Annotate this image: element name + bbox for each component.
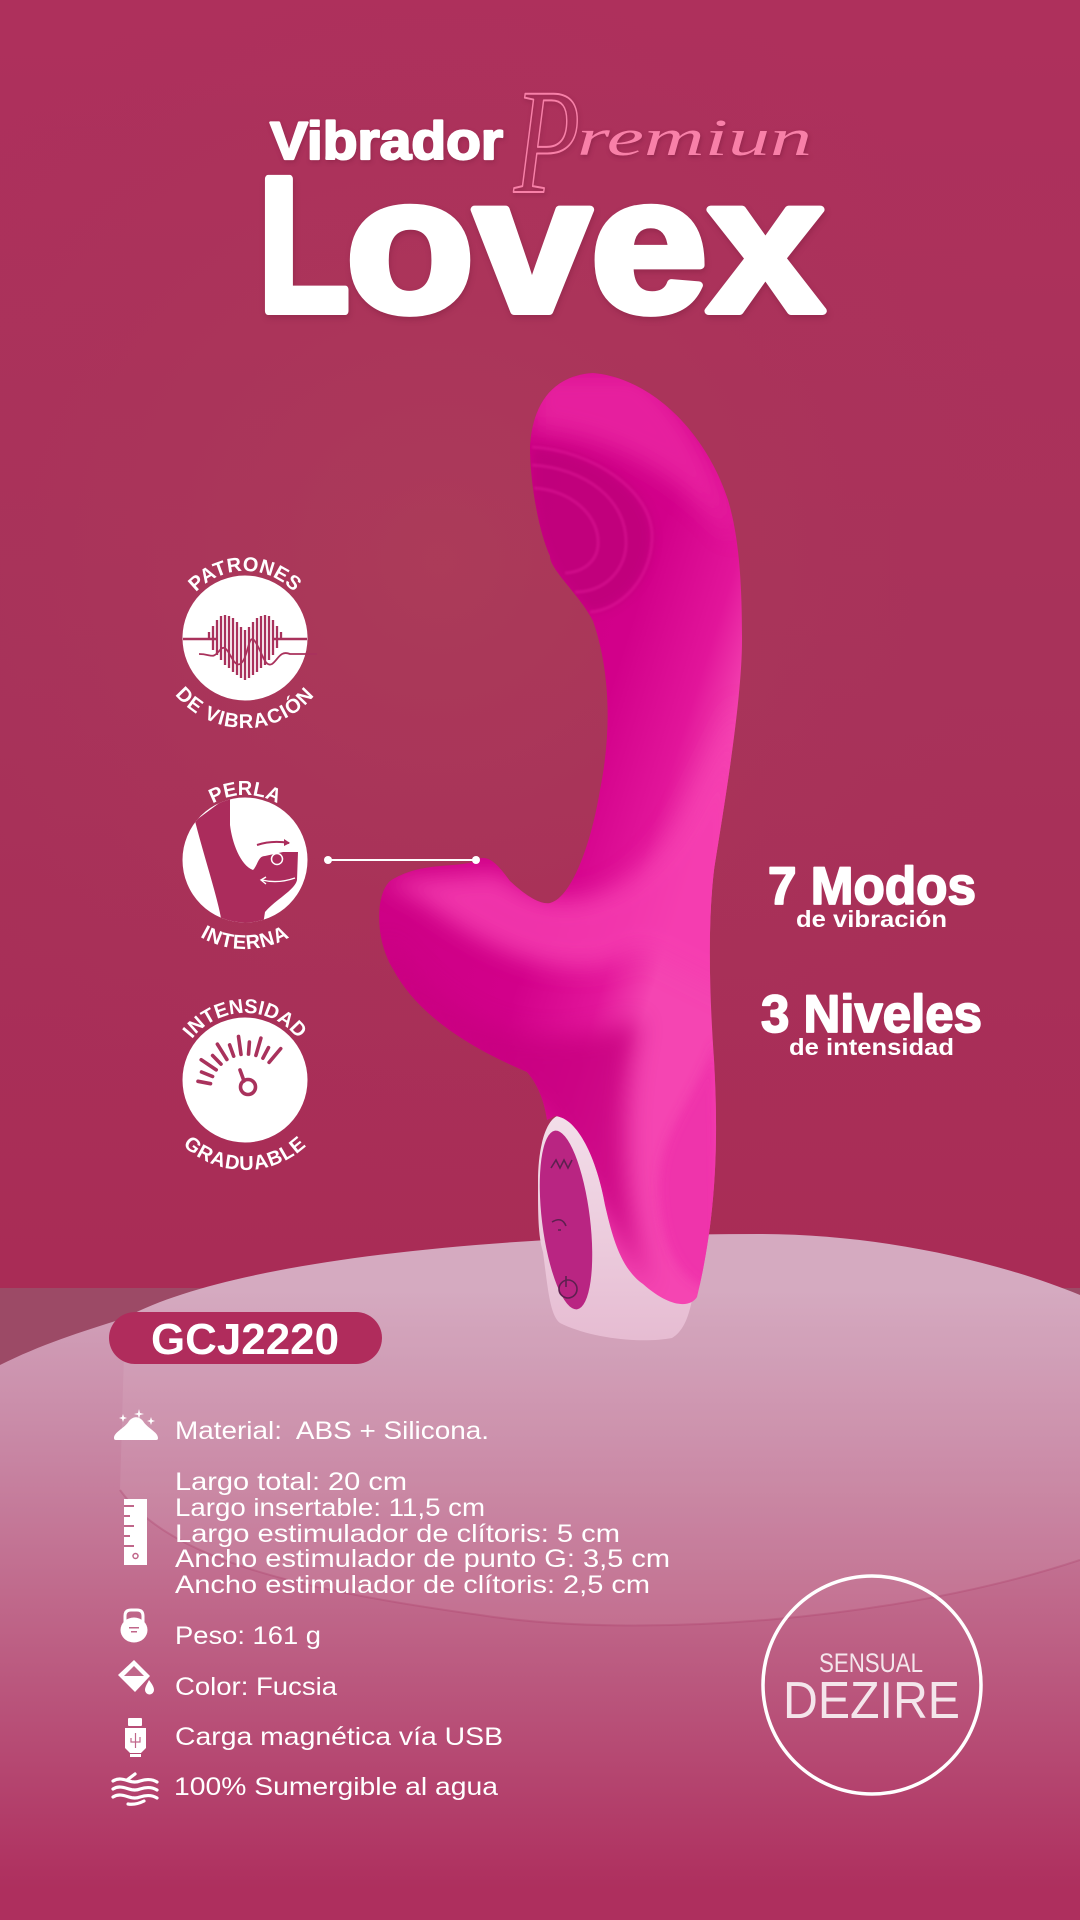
spec: waterproof: 100% Sumergible al agua (174, 1773, 498, 1801)
icon: ruler (124, 1499, 147, 1565)
background wall (0, 0, 1080, 1378)
title: Lovex: L (258, 137, 350, 352)
product: vibrator (379, 373, 742, 1340)
feature badge: perla interna (182, 781, 308, 950)
label: INTERNA: INTERNA (201, 925, 289, 950)
title: Premiun script: remiun (577, 110, 812, 167)
ridges (532, 447, 652, 612)
title: Premiun script (513, 59, 812, 225)
icon: heart waveform (183, 615, 317, 680)
product code pill (109, 1312, 382, 1364)
feature badge: patrones de vibración (176, 557, 314, 728)
spec: dimensions: Largo estimulador de clítoris: 5 cm (175, 1520, 620, 1548)
stat: 7 modos de vibración: de vibración (796, 906, 947, 932)
brand logo: Sensual Dezire: SENSUAL (819, 1648, 923, 1678)
label: PERLA: PERLA (208, 781, 278, 803)
callout line to internal pearl (324, 856, 480, 864)
spec: dimensions (124, 1468, 670, 1599)
brand logo: Sensual Dezire: DEZIRE (783, 1672, 960, 1730)
spec: color: Color: Fucsia (175, 1673, 337, 1701)
stat: 3 niveles de intensidad: 3 Niveles (761, 985, 982, 1044)
spec: material: Material: ABS + Silicona. (175, 1417, 489, 1445)
product code pill: GCJ2220 (151, 1315, 339, 1364)
spec: weight: Peso: 161 g (175, 1622, 321, 1650)
product base (538, 1115, 692, 1340)
icon: material mound (114, 1409, 158, 1440)
label: INTENSIDAD: INTENSIDAD (182, 999, 306, 1038)
spec: dimensions: Ancho estimulador de clítoris: 2,5 cm (175, 1571, 650, 1599)
spec: charging: Carga magnética vía USB (175, 1723, 503, 1751)
spec: waterproof (113, 1773, 498, 1804)
icon: usb stick (125, 1718, 146, 1757)
title: Lovex: ovex (346, 137, 824, 352)
title: Premiun script: P (513, 59, 580, 225)
icon: kettlebell (120, 1610, 148, 1642)
spec: weight (120, 1610, 321, 1650)
spec: dimensions: Largo insertable: 11,5 cm (175, 1494, 485, 1522)
icon: water waves (113, 1774, 157, 1804)
label: PATRONES: PATRONES (188, 557, 301, 592)
label: DE VIBRACIÓN: DE VIBRACIÓN (176, 686, 314, 728)
spec: material (114, 1409, 489, 1445)
display table (0, 1234, 1080, 1920)
title: Vibrador: Vibrador (270, 112, 503, 171)
icon: product silhouette (195, 795, 298, 925)
product body (379, 373, 742, 1304)
control panel (531, 1128, 601, 1312)
spec: color (118, 1660, 337, 1701)
icon: gauge (198, 1036, 281, 1094)
feature badge: intensidad graduable (182, 999, 308, 1170)
stat: 3 niveles de intensidad: de intensidad (789, 1034, 954, 1060)
icon: paint bucket (118, 1660, 154, 1695)
label: GRADUABLE: GRADUABLE (186, 1136, 306, 1170)
spec: dimensions: Ancho estimulador de punto G: 3,5 cm (175, 1545, 670, 1573)
spec: dimensions: Largo total: 20 cm (175, 1468, 407, 1496)
brand logo: Sensual Dezire (763, 1576, 981, 1794)
spec: charging (125, 1718, 503, 1757)
stat: 7 modos de vibración: 7 Modos (768, 857, 976, 916)
